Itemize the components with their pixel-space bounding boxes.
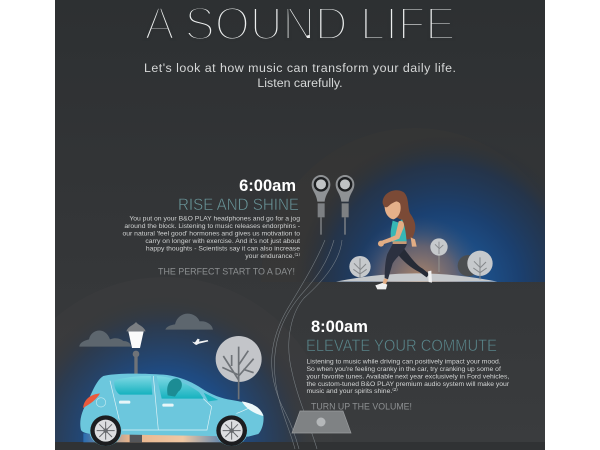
icon: earbuds <box>312 175 354 235</box>
fringe <box>383 196 404 207</box>
rear window <box>114 376 152 395</box>
intro text: Listen carefully. <box>257 76 343 90</box>
fuel cap <box>96 398 106 407</box>
time 8:00am: 8:00am <box>311 318 368 336</box>
intro text <box>144 61 456 90</box>
arm right <box>411 237 417 247</box>
back leg <box>395 243 429 277</box>
time 6:00am: 6:00am <box>239 177 296 195</box>
headlight <box>242 401 263 416</box>
body text <box>122 216 300 260</box>
tree middle <box>430 238 448 272</box>
taillight <box>83 393 100 408</box>
waist <box>393 241 407 244</box>
front window <box>157 376 204 399</box>
tagline: TURN UP THE VOLUME! <box>311 402 412 412</box>
driver <box>167 378 182 397</box>
panel: 6:00am glow <box>261 128 545 282</box>
rear wheel <box>89 413 122 446</box>
body text: your favorite tunes. Available next year exclusively in Ford vehicles, <box>306 374 509 380</box>
body text: So when you're feeling cranky in the car, try cranking up some of <box>306 366 501 373</box>
cloud left <box>79 331 131 347</box>
body text: carry on longer with exercise. And it's not just about <box>145 238 300 245</box>
body text: happy thoughts - Scientists say it can also increase <box>146 246 300 252</box>
body text: music and your spirits shine.⁽²⁾ <box>306 387 398 395</box>
section: rise and shine <box>122 177 300 278</box>
tree left <box>349 256 371 278</box>
windshield <box>204 393 218 401</box>
body text <box>306 358 510 395</box>
hair <box>383 190 415 239</box>
door lines <box>110 376 252 430</box>
face <box>385 201 401 219</box>
handles <box>119 401 130 404</box>
runner <box>375 190 432 289</box>
panel: 8:00am glow <box>55 277 333 442</box>
body text: your endurance.⁽¹⁾ <box>245 252 300 260</box>
section: elevate your commute <box>306 318 510 412</box>
intro text: Let's look at how music can transform your daily life. <box>144 61 456 75</box>
shoes <box>375 283 387 289</box>
heading elevate your commute: ELEVATE YOUR COMMUTE <box>306 336 497 355</box>
front wheel <box>215 413 248 446</box>
front leg <box>385 243 407 279</box>
heading rise and shine: RISE AND SHINE <box>178 195 299 214</box>
curb post <box>130 434 142 442</box>
icon: plane <box>192 339 208 345</box>
body text: the custom-tuned B&O PLAY premium audio system will make your <box>306 381 510 388</box>
ground hill <box>336 273 497 282</box>
illustration: car scene <box>79 314 264 446</box>
sound wave lines <box>272 240 342 449</box>
top <box>391 219 407 242</box>
light under car <box>83 433 237 442</box>
tagline: THE PERFECT START TO A DAY! <box>158 266 295 278</box>
tree <box>216 336 262 399</box>
car <box>80 374 264 446</box>
street lamp <box>126 322 146 374</box>
arm <box>379 221 404 245</box>
body text: our natural 'feel good' hormones and gives us motivation to <box>122 230 300 238</box>
tree right <box>458 251 493 279</box>
icon: speaker <box>292 411 351 433</box>
illustration: runner scene <box>336 190 497 289</box>
cloud right <box>165 314 213 330</box>
car body <box>80 374 264 437</box>
body text: You put on your B&O PLAY headphones and go for a jog <box>129 216 300 222</box>
body text: around the block. Listening to music releases endorphins - <box>124 223 300 230</box>
road <box>55 442 545 450</box>
body text: Listening to music while driving can positively impact your mood. <box>306 358 501 366</box>
